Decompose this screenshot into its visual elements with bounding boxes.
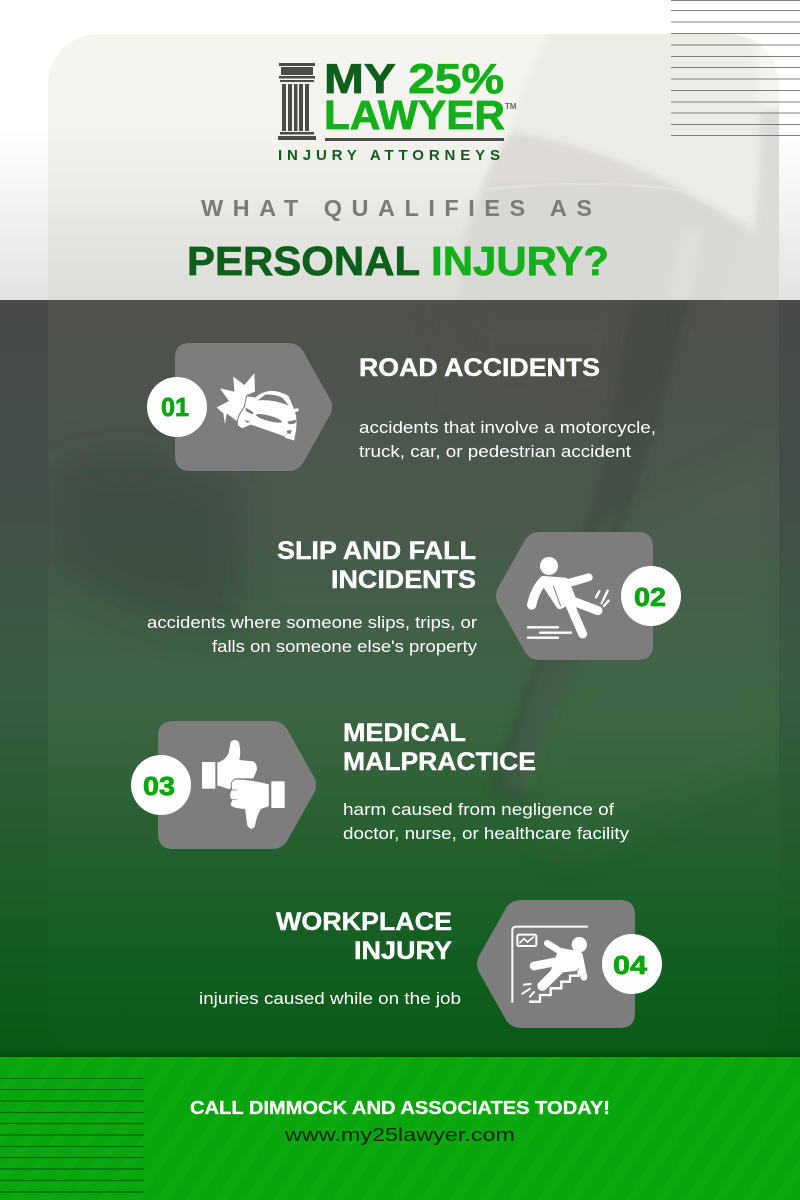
footer decorative lines [0, 1078, 144, 1192]
icon: thumbs up and down [202, 740, 285, 829]
background top [0, 0, 800, 300]
description: road accidents [359, 419, 656, 461]
number 04: 04 [613, 950, 648, 980]
footer website: www.my25lawyer.com [284, 1125, 515, 1145]
icon: slip and fall [528, 557, 609, 638]
number circle 03 [131, 755, 191, 815]
description: road accidents: accidents that involve a motorcycle, [359, 419, 656, 437]
number 02: 02 [634, 582, 666, 612]
title: slip and fall incidents: SLIP AND FALL [277, 537, 476, 565]
title: slip and fall incidents [277, 537, 476, 594]
logo [278, 55, 517, 164]
badge 02 [496, 532, 653, 660]
icon: pillar [278, 63, 316, 140]
decorative lines top right [671, 0, 800, 136]
description: slip and fall: accidents where someone slips, trips, or [147, 614, 478, 632]
badge 01 [175, 343, 332, 471]
logo wordmark: LAWYER: LAWYER [324, 92, 505, 138]
heading: what qualifies as: WHAT QUALIFIES AS [201, 195, 592, 221]
title: medical malpractice: MALPRACTICE [343, 748, 536, 776]
description: slip and fall [147, 614, 478, 656]
description: medical malpractice: doctor, nurse, or healthcare facility [343, 825, 630, 843]
description: road accidents: truck, car, or pedestrian accident [359, 443, 631, 461]
title: road accidents: ROAD ACCIDENTS [359, 354, 600, 382]
title: medical malpractice [343, 719, 536, 776]
title: workplace injury: WORKPLACE [276, 908, 452, 936]
background dark gradient [0, 300, 800, 1057]
heading: personal injury: PERSONAL INJURY? [187, 238, 609, 284]
number 03: 03 [143, 771, 175, 801]
description: medical malpractice [343, 801, 630, 843]
number circle 04 [602, 934, 662, 994]
logo rule [325, 138, 504, 141]
footer call to action: CALL DIMMOCK AND ASSOCIATES TODAY! [190, 1097, 610, 1118]
logo tagline: INJURY ATTORNEYS [278, 147, 500, 164]
logo wordmark: MY 25%: MY 25% [324, 55, 504, 102]
description: slip and fall: falls on someone else's property [212, 638, 478, 656]
description: medical malpractice: harm caused from negligence of [343, 801, 614, 819]
item 01: road accidents [147, 343, 656, 471]
item 04: workplace injury [199, 900, 662, 1028]
title: workplace injury: INJURY [354, 937, 452, 965]
item 03: medical malpractice [131, 719, 630, 849]
item 02: slip and fall [147, 532, 681, 660]
title: workplace injury [276, 908, 452, 965]
number 01: 01 [161, 392, 189, 422]
footer band [0, 1050, 800, 1200]
title: slip and fall incidents: INCIDENTS [331, 566, 476, 594]
trademark: TM [505, 102, 517, 111]
description: workplace injury: injuries caused while on the job [199, 990, 461, 1008]
photo panel: upper [48, 30, 800, 310]
icon: fall on stairs [512, 927, 588, 1003]
title: medical malpractice: MEDICAL [343, 719, 466, 747]
number circle 02 [621, 566, 681, 626]
photo panel: lower [48, 300, 779, 831]
number circle 01 [147, 377, 207, 437]
badge 03 [158, 721, 316, 849]
badge 04 [477, 900, 635, 1028]
icon: car crash [217, 373, 299, 441]
